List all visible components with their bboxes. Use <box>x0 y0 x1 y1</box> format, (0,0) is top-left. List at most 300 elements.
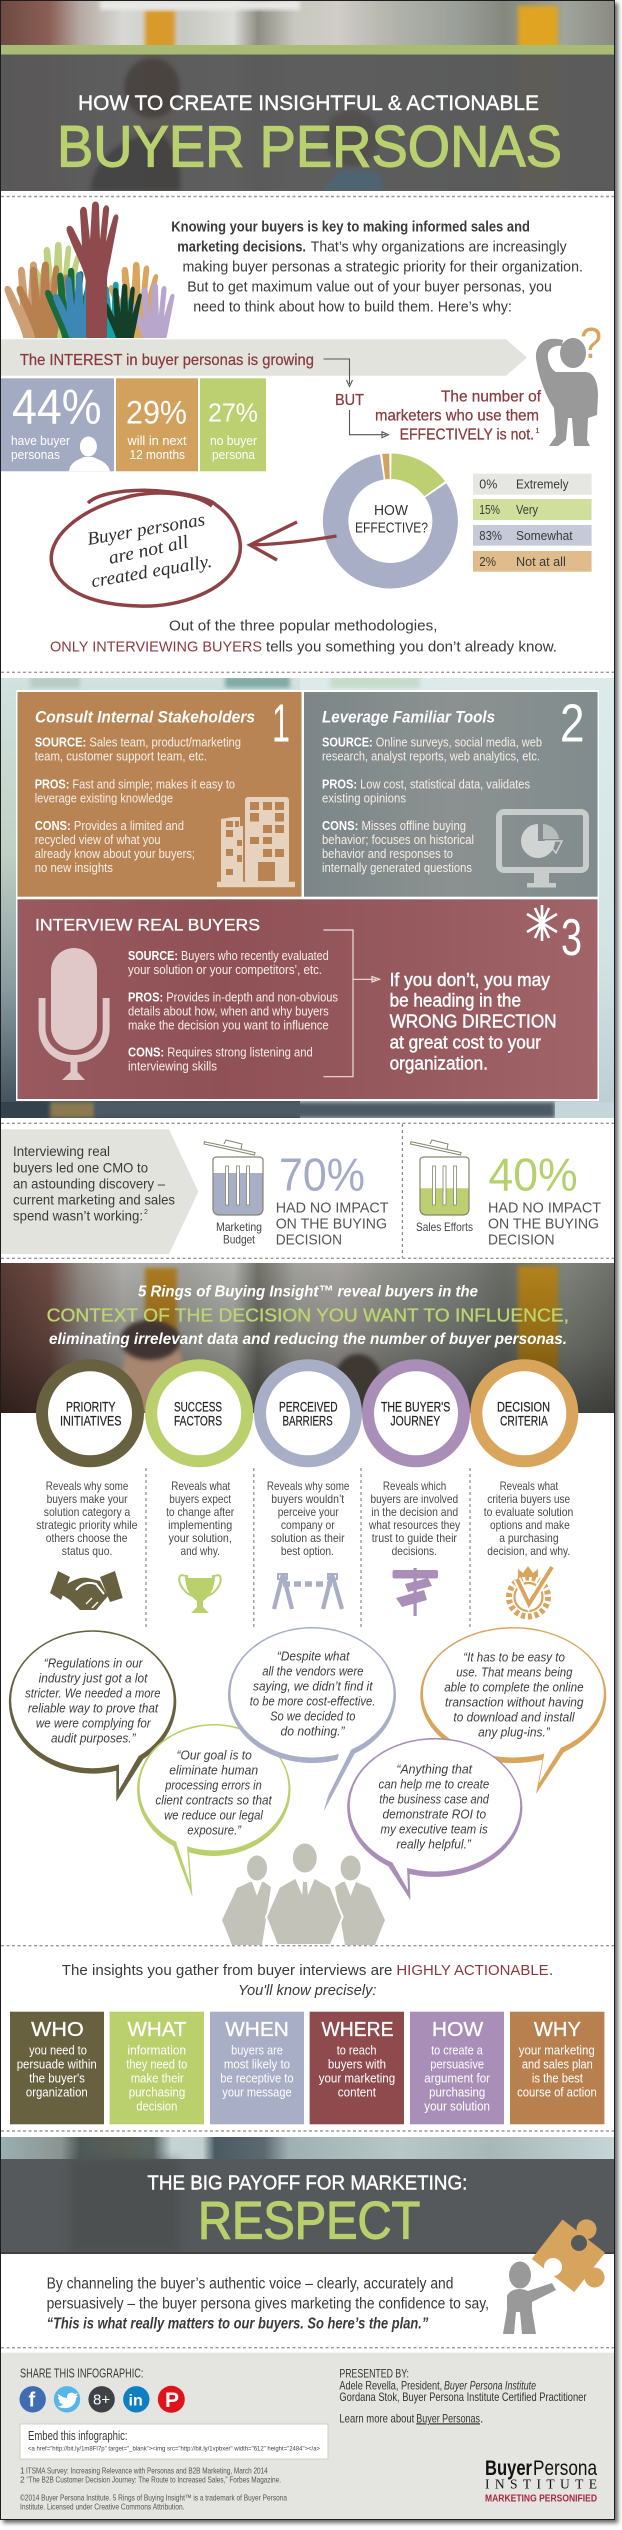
arrow: connector to statement <box>350 410 388 438</box>
panel: consult internal stakeholders: team, customer support team, etc. <box>35 750 207 764</box>
green band <box>1 45 614 54</box>
ring: decision criteria: DECISION <box>497 1400 550 1415</box>
panel: interview real buyers: make the decision you want to influence <box>128 1018 329 1032</box>
card: why: your marketing <box>519 2043 595 2057</box>
callout: wrong direction warning: at great cost to your <box>390 1032 541 1053</box>
text: decision criteria description: a purchasing <box>499 1531 559 1545</box>
speech bubble: human errors: processing errors in <box>164 1777 262 1792</box>
arrow: brush to circle <box>250 522 336 560</box>
stat: 70% no impact: HAD NO IMPACT <box>276 1199 388 1216</box>
legend: Somewhat <box>516 528 573 543</box>
intro text: Knowing your buyers is key to making informed sales and <box>171 220 530 236</box>
panel: consult internal stakeholders: recycled view of what you <box>35 833 161 847</box>
photo background: methodologies <box>1 676 614 1118</box>
icon: office buildings <box>217 797 295 887</box>
panel: leverage familiar tools: CONS: Misses offline buying <box>322 819 466 833</box>
stat: 70% no impact: DECISION <box>276 1231 342 1248</box>
panel: footer <box>1 2353 614 2519</box>
card: where: WHERE <box>322 2019 394 2041</box>
stat: 27%: no buyer <box>210 433 258 448</box>
copyright: ©2014 Buyer Persona Institute. 5 Rings of Buying Insight™ is a trademark of Buyer Persona <box>20 2493 287 2503</box>
stat: 40% no impact: DECISION <box>488 1231 555 1248</box>
icon: google plus: 8+ <box>93 2392 110 2408</box>
text: success factors description: implementing <box>168 1518 232 1532</box>
heading: highly actionable: . <box>549 1962 553 1979</box>
speech bubble: easy to use: able to complete the online <box>444 1680 584 1695</box>
legend: 2% <box>479 554 496 569</box>
stat: 40% no impact <box>488 1149 601 1248</box>
icon: google plus <box>88 2386 115 2412</box>
speech bubble: demonstrate ROI <box>347 1738 522 1900</box>
text: buyer's journey description: Reveals which <box>383 1479 446 1493</box>
card: how: argument for <box>424 2071 490 2085</box>
text: priority initiatives description: others choose the <box>46 1531 128 1545</box>
arrow banner: interest growing <box>1 339 527 376</box>
speech bubble: human errors: “Our goal is to <box>176 1747 252 1762</box>
panel: interview real buyers: PROS: Provides in-depth and non-obvious <box>128 991 338 1005</box>
speech bubble: demonstrate ROI: really helpful.” <box>396 1836 472 1851</box>
arrow: connector to BUT <box>324 359 352 386</box>
panel: consult internal stakeholders: already know about your buyers; <box>35 847 195 861</box>
text: buyer's journey description <box>368 1479 460 1558</box>
stat: 40% no impact: HAD NO IMPACT <box>488 1199 601 1216</box>
panel: interview real buyers: your solution or your competitors’, etc. <box>128 963 322 977</box>
speech bubble: demonstrate ROI: demonstrate ROI to <box>382 1806 486 1821</box>
ring: priority initiatives: INITIATIVES <box>60 1414 122 1429</box>
icon: criteria badge <box>509 1566 553 1616</box>
callout: hand-drawn circle <box>51 490 240 606</box>
callout: CMO discovery: buyers led one CMO to <box>13 1159 148 1175</box>
copyright: Institute. Licensed under Creative Commons Attribution. <box>20 2501 184 2511</box>
text: decision criteria description: Reveals what <box>500 1479 559 1493</box>
text: priority initiatives description: status quo. <box>62 1544 112 1558</box>
text: buyer's journey description: what resources they <box>368 1518 460 1532</box>
label: marketing budget: Marketing <box>216 1220 262 1234</box>
panel: consult internal stakeholders: CONS: Provides a limited and <box>35 819 184 833</box>
card: how: persuasive <box>430 2057 484 2071</box>
legend: Very <box>516 502 538 517</box>
text: buyer's journey description: decisions. <box>392 1544 437 1558</box>
heading: share: SHARE THIS INFOGRAPHIC: <box>20 2367 143 2381</box>
text: success factors description <box>166 1479 234 1558</box>
text: presented by: Buyer Persona Institute <box>444 2378 536 2392</box>
speech bubble: regulations: audit purposes.” <box>51 1730 136 1745</box>
ring: decision criteria: CRITERIA <box>500 1414 548 1429</box>
panels: methodologies frame <box>1 690 622 2519</box>
callout: CMO discovery <box>1 1129 198 1254</box>
text: payoff statement <box>47 2275 489 2332</box>
card: why: and sales plan <box>522 2057 593 2071</box>
text: buyer's journey description: in the decision and <box>371 1505 458 1519</box>
speech bubble: demonstrate ROI: my executive team is <box>380 1821 488 1836</box>
icon: monitor with pie chart <box>499 812 586 888</box>
speech bubble: easy to use: use. That means being <box>456 1665 573 1680</box>
card: when: buyers are <box>231 2043 283 2057</box>
heading: five rings: CONTEXT OF THE DECISION YOU WANT TO INFLUENCE, <box>47 1305 569 1326</box>
speech bubble: easy to use: “It has to be easy to <box>463 1650 565 1665</box>
text: presented by: . <box>480 2411 483 2425</box>
donut chart: how effective <box>323 454 458 588</box>
stat: 40% no impact: ON THE BUYING <box>488 1215 599 1232</box>
card: what: make their <box>131 2071 184 2085</box>
card: when: be receptive to <box>220 2071 294 2085</box>
ring: priority initiatives <box>42 1365 138 1461</box>
ring: decision criteria <box>476 1365 572 1461</box>
panel: leverage familiar tools: research, analyst reports, web analytics, etc. <box>322 750 540 764</box>
text: payoff statement: “This is what really matters to our buyers. So here’s the plan.” <box>47 2315 428 2332</box>
text: perceived barriers description: buyers wouldn’t <box>271 1492 345 1506</box>
text: perceived barriers description: company or <box>281 1518 335 1532</box>
text: perceived barriers description: perceive your <box>278 1505 339 1519</box>
text: perceived barriers description <box>267 1479 350 1558</box>
callout: wrong direction warning: WRONG DIRECTION <box>390 1011 557 1032</box>
ring: the buyer's journey: JOURNEY <box>390 1414 440 1429</box>
card: who: WHO <box>31 2019 84 2041</box>
heading: five rings <box>47 1284 569 1348</box>
icon: trash can marketing budget <box>204 1140 263 1215</box>
ring: perceived barriers: BARRIERS <box>282 1414 333 1429</box>
speech bubble: regulations: stricter. We needed a more <box>25 1685 161 1700</box>
heading: five rings: 5 Rings of Buying Insight™ reveal buyers in the <box>138 1284 478 1301</box>
text: priority initiatives description <box>36 1479 138 1558</box>
card: what: they need to <box>126 2057 187 2071</box>
copyright <box>20 2493 287 2511</box>
text: buyer's journey description: trust to guide their <box>372 1531 457 1545</box>
text: perceived barriers description: Reveals why some <box>267 1479 350 1493</box>
icon: linkedin: in <box>128 2392 143 2410</box>
speech bubble: demonstrate ROI: can help me to create <box>378 1776 489 1791</box>
heading: five rings: eliminating irrelevant data and reducing the number of buyer personas. <box>49 1331 567 1348</box>
callout: wrong direction warning: If you don’t, you may <box>390 969 551 990</box>
text: methodologies lead-in: Out of the three popular methodologies, <box>169 618 438 635</box>
speech bubble: do nothing: saying, we didn’t find it <box>253 1679 374 1694</box>
icon: twitter <box>54 2386 80 2412</box>
callout: marketers effectiveness: EFFECTIVELY is not. <box>400 427 534 444</box>
card: who <box>10 2012 104 2124</box>
header photo with title <box>1 0 614 191</box>
footnotes <box>20 2465 281 2484</box>
speech bubble: easy to use: to download and install <box>453 1710 576 1725</box>
text: decision criteria description: criteria buyers use <box>487 1492 570 1506</box>
speech bubble: human errors: eliminate human <box>169 1762 258 1777</box>
speech bubble: easy to use: transaction without having <box>445 1695 584 1710</box>
panel: interview real buyers: INTERVIEW REAL BUYERS <box>35 916 260 935</box>
icon: facebook <box>20 2386 46 2412</box>
icon: pinterest <box>158 2386 185 2413</box>
card: why: WHY <box>534 2019 581 2041</box>
intro text: making buyer personas a strategic priority for their organization. <box>182 260 583 276</box>
footnotes: ITSMA Survey: Increasing Relevance with Personas and B2B Marketing, March 2014 <box>26 2465 268 2475</box>
text: success factors description: your solution, <box>168 1531 232 1545</box>
photo band: payoff <box>1 2137 614 2254</box>
intro text: marketing decisions. <box>177 240 306 256</box>
text: priority initiatives description: buyers make your <box>47 1492 128 1506</box>
icon: signpost <box>392 1568 438 1616</box>
speech bubble: regulations: reliable way to prove that <box>28 1700 159 1715</box>
title: BUYER PERSONAS <box>57 114 562 180</box>
panel: interview real buyers <box>18 899 598 1099</box>
callout: hand-drawn circle: Buyer personas <box>86 510 207 550</box>
icon: three business people <box>222 1844 385 1945</box>
panel: consult internal stakeholders: SOURCE: Sales team, product/marketing <box>35 736 241 750</box>
text: priority initiatives description: strategic priority while <box>36 1518 138 1532</box>
label: BUT: BUT <box>335 392 364 409</box>
speech bubble: regulations <box>9 1630 176 1802</box>
card: when: WHEN <box>225 2019 289 2041</box>
ring: the buyer's journey <box>368 1365 464 1461</box>
card: where: buyers with <box>328 2057 386 2071</box>
embed box: Embed this infographic: <box>28 2429 128 2443</box>
stat: 29% <box>116 378 198 471</box>
stat: 27%: persona <box>212 447 256 462</box>
ring: priority initiatives: PRIORITY <box>66 1400 116 1415</box>
panel: leverage familiar tools: existing opinions <box>322 791 406 805</box>
speech bubble: do nothing <box>228 1627 396 1812</box>
card: how: your solution <box>424 2100 490 2114</box>
stat: 44%: personas <box>11 447 60 462</box>
text: priority initiatives description: Reveals why some <box>46 1479 129 1493</box>
card: why <box>510 2012 604 2124</box>
speech bubble: easy to use: any plug-ins.” <box>478 1725 550 1740</box>
stat: 29%: will in next <box>127 433 187 448</box>
stat: 70% no impact <box>276 1149 388 1248</box>
subtitle: HOW TO CREATE INSIGHTFUL & ACTIONABLE <box>78 92 539 115</box>
icon: facebook: f <box>28 2390 36 2412</box>
embed box: <a href="http://bit.ly/1m8FI7p" target="_blank"><img src="http://bit.ly/1vpbxer" width="612" height="2484"></a> <box>28 2446 320 2453</box>
card: when: your message <box>222 2086 292 2100</box>
heading: big payoff: THE BIG PAYOFF FOR MARKETING: <box>147 2172 467 2194</box>
text: perceived barriers description: solution as their <box>271 1531 345 1545</box>
text: decision criteria description <box>484 1479 573 1558</box>
callout: marketers effectiveness: 1 <box>536 428 540 435</box>
panel: leverage familiar tools: 2 <box>560 694 584 754</box>
card: what: WHAT <box>128 2019 186 2041</box>
footnotes: “The B2B Customer Decision Journey: The Route to Increased Sales,” Forbes Magazine. <box>26 2474 281 2484</box>
card: how: HOW <box>432 2019 483 2041</box>
ring: perceived barriers: PERCEIVED <box>279 1400 338 1415</box>
text: methodologies lead-in <box>50 618 557 656</box>
panel: leverage familiar tools: behavior; focuses on historical <box>322 833 474 847</box>
panel: consult internal stakeholders: leverage existing knowledge <box>35 791 173 805</box>
ring: perceived barriers <box>260 1365 356 1461</box>
icon: thinking person: ? <box>580 319 602 368</box>
icon: pinterest: P <box>165 2389 179 2412</box>
speech bubble: human errors: we reduce our legal <box>164 1807 264 1822</box>
panel: leverage familiar tools: internally generated questions <box>322 861 472 875</box>
icon: person holding puzzle <box>503 2262 556 2334</box>
panel: interview real buyers: interviewing skills <box>128 1060 217 1074</box>
card: why: is the best <box>532 2071 583 2085</box>
legend <box>473 474 592 572</box>
intro text: But to get maximum value out of your buyer personas, you <box>187 280 552 296</box>
logo: Buyer Persona Institute <box>485 2457 597 2505</box>
text: payoff statement: persuasively – the buyer persona gives marketing the confidence to say, <box>47 2295 489 2312</box>
icon: road barrier <box>274 1574 342 1609</box>
text: payoff statement: By channeling the buyer’s authentic voice – clearly, accurately and <box>47 2275 453 2292</box>
callout: marketers effectiveness: marketers who use them <box>375 408 539 425</box>
label: sales efforts: Sales Efforts <box>416 1220 473 1234</box>
card: who: the buyer's <box>29 2071 85 2085</box>
photo background: five rings <box>1 1263 614 1414</box>
speech bubble: do nothing: So we decided to <box>270 1709 355 1724</box>
speech bubble: do nothing: to be more cost-effective. <box>250 1694 375 1709</box>
text: perceived barriers description: best option. <box>281 1544 334 1558</box>
callout: CMO discovery: current marketing and sales <box>13 1191 175 1207</box>
stat: 29%: 12 months <box>130 447 185 462</box>
card: what: purchasing <box>129 2086 185 2100</box>
logo: Buyer Persona Institute: INSTITUTE <box>485 2476 597 2491</box>
footnotes: 1 <box>20 2465 25 2475</box>
label: marketing budget <box>216 1220 262 1246</box>
text: decision criteria description: options and make <box>490 1518 570 1532</box>
callout: wrong direction warning: organization. <box>390 1052 488 1073</box>
speech bubble: do nothing: all the vendors were <box>262 1664 363 1679</box>
callout: marketers effectiveness <box>375 389 542 444</box>
card: who: persuade within <box>17 2057 97 2071</box>
text: presented by: Adele Revella, President, <box>339 2378 442 2392</box>
panel: interview real buyers: CONS: Requires strong listening and <box>128 1046 313 1060</box>
card: how <box>410 2012 504 2124</box>
stat: 40% no impact: 40% <box>488 1149 578 1201</box>
ring: success factors <box>151 1365 247 1461</box>
stat: 29%: 29% <box>126 394 187 430</box>
icon: linkedin <box>123 2386 150 2412</box>
callout: wrong direction warning: be heading in the <box>390 990 521 1011</box>
text: success factors description: to change after <box>166 1505 234 1519</box>
card: what: information <box>128 2043 186 2057</box>
speech bubble: human errors: client contracts so that <box>155 1792 273 1807</box>
text: decision criteria description: decision, and why. <box>487 1544 570 1558</box>
heading: highly actionable: The insights you gather from buyer interviews are <box>62 1962 392 1979</box>
text: success factors description: Reveals what <box>171 1479 231 1493</box>
text: presented by: PRESENTED BY: <box>339 2367 409 2381</box>
text: decision criteria description: to evaluate solution <box>484 1505 573 1519</box>
text: success factors description: buyers expect <box>169 1492 232 1506</box>
panel: consult internal stakeholders: 1 <box>272 694 290 754</box>
card: how: to create a <box>431 2043 483 2057</box>
card: who: organization <box>26 2086 88 2100</box>
card: where: your marketing <box>319 2071 395 2085</box>
text: methodologies lead-in: ONLY INTERVIEWING BUYERS <box>50 639 262 656</box>
stat: 44%: have buyer <box>11 433 71 448</box>
stat: 44%: 44% <box>12 380 102 434</box>
icon: handshake <box>50 1571 123 1610</box>
speech bubble: regulations: we were complying for <box>36 1715 151 1730</box>
heading: highly actionable: HIGHLY ACTIONABLE <box>396 1962 549 1979</box>
icon: puzzle piece <box>532 2206 622 2303</box>
panel: leverage familiar tools: SOURCE: Online surveys, social media, web <box>322 736 542 750</box>
panel: consult internal stakeholders <box>18 692 302 897</box>
text: success factors description: and why. <box>180 1544 220 1558</box>
icon: trophy <box>179 1573 221 1613</box>
card: where: to reach <box>337 2043 377 2057</box>
stat: 27% <box>200 378 266 471</box>
callout: marketers effectiveness: The number of <box>441 389 542 406</box>
logo: Buyer Persona Institute: MARKETING PERSONIFIED <box>485 2494 597 2505</box>
legend: 15% <box>479 502 500 517</box>
card: what: decision <box>136 2100 177 2114</box>
intro text <box>171 220 583 316</box>
speech bubble: regulations: “Regulations in our <box>44 1655 143 1670</box>
ring: success factors: FACTORS <box>174 1414 222 1429</box>
panel: leverage familiar tools: Leverage Familiar Tools <box>322 708 495 727</box>
stat: 70% no impact: ON THE BUYING <box>276 1215 387 1232</box>
icon: microphone <box>39 948 110 1080</box>
speech bubble: human errors <box>137 1724 290 1897</box>
heading: highly actionable: You'll know precisely: <box>238 1982 376 1999</box>
footnotes: 2 <box>20 2474 25 2484</box>
panel: interview real buyers: details about how, when and why buyers <box>128 1004 329 1018</box>
legend: 0% <box>479 477 498 492</box>
icon: thinking person <box>536 319 602 446</box>
speech bubble: easy to use <box>420 1627 606 1794</box>
heading: highly actionable <box>62 1962 553 1999</box>
legend: Not at all <box>516 554 566 569</box>
embed box <box>20 2424 328 2459</box>
text: presented by <box>339 2367 586 2425</box>
speech bubble: do nothing: “Despite what <box>277 1649 351 1664</box>
callout: hand-drawn circle: created equally. <box>90 552 213 592</box>
callout: hand-drawn circle: are not all <box>107 532 190 569</box>
heading: respect: RESPECT <box>198 2191 420 2250</box>
intro text: That’s why organizations are increasingly <box>311 240 567 256</box>
panel: consult internal stakeholders: no new insights <box>35 861 113 875</box>
card: where <box>310 2012 404 2124</box>
legend: Extremely <box>516 477 569 492</box>
speech bubble: do nothing: do nothing.” <box>280 1724 345 1739</box>
text: presented by: Learn more about <box>339 2411 415 2425</box>
text: methodologies lead-in: tells you something you don’t already know. <box>266 639 557 656</box>
icon: trash can sales efforts <box>410 1140 469 1215</box>
number 3: 3 <box>561 909 582 967</box>
panel: leverage familiar tools: PROS: Low cost, statistical data, validates <box>322 777 530 791</box>
text: priority initiatives description: solution category a <box>44 1505 131 1519</box>
donut chart: how effective: EFFECTIVE? <box>355 519 428 536</box>
callout: CMO discovery: spend wasn’t working: <box>13 1207 143 1223</box>
callout: CMO discovery: Interviewing real <box>13 1143 110 1159</box>
donut chart: how effective: HOW <box>374 502 409 519</box>
panel: consult internal stakeholders: PROS: Fast and simple; makes it easy to <box>35 777 235 791</box>
arrow banner: interest growing: The INTEREST in buyer personas is growing <box>20 352 314 369</box>
intro text: need to think about how to build them. Here’s why: <box>193 300 512 316</box>
card: when: most likely to <box>224 2057 290 2071</box>
callout: CMO discovery: 2 <box>144 1209 148 1216</box>
logo: Buyer Persona Institute: Buyer <box>485 2457 532 2480</box>
speech bubble: demonstrate ROI: the business case and <box>379 1791 490 1806</box>
stat: 70% no impact: 70% <box>279 1149 365 1201</box>
text: presented by: Buyer Personas <box>416 2411 480 2425</box>
logo: Buyer Persona Institute: Persona <box>533 2457 597 2480</box>
label: marketing budget: Budget <box>223 1232 256 1246</box>
callout: wrong direction warning <box>390 969 557 1073</box>
legend: 83% <box>479 528 502 543</box>
card: why: course of action <box>517 2086 597 2100</box>
ring: success factors: SUCCESS <box>174 1400 222 1415</box>
panel: consult internal stakeholders: Consult Internal Stakeholders <box>35 708 255 727</box>
speech bubble: human errors: exposure.” <box>187 1822 242 1837</box>
text: buyer's journey description: buyers are involved <box>370 1492 458 1506</box>
panel: leverage familiar tools: behavior and responses to <box>322 847 453 861</box>
panel: leverage familiar tools <box>304 692 598 897</box>
ring: the buyer's journey: THE BUYER'S <box>381 1400 450 1415</box>
card: when <box>210 2012 304 2124</box>
speech bubble: regulations: industry just got a lot <box>39 1670 149 1685</box>
stat: 44% <box>1 378 114 471</box>
card: who: you need to <box>29 2043 87 2057</box>
card: what <box>110 2012 204 2124</box>
card: where: content <box>338 2086 376 2100</box>
stat: 27%: 27% <box>208 398 258 428</box>
